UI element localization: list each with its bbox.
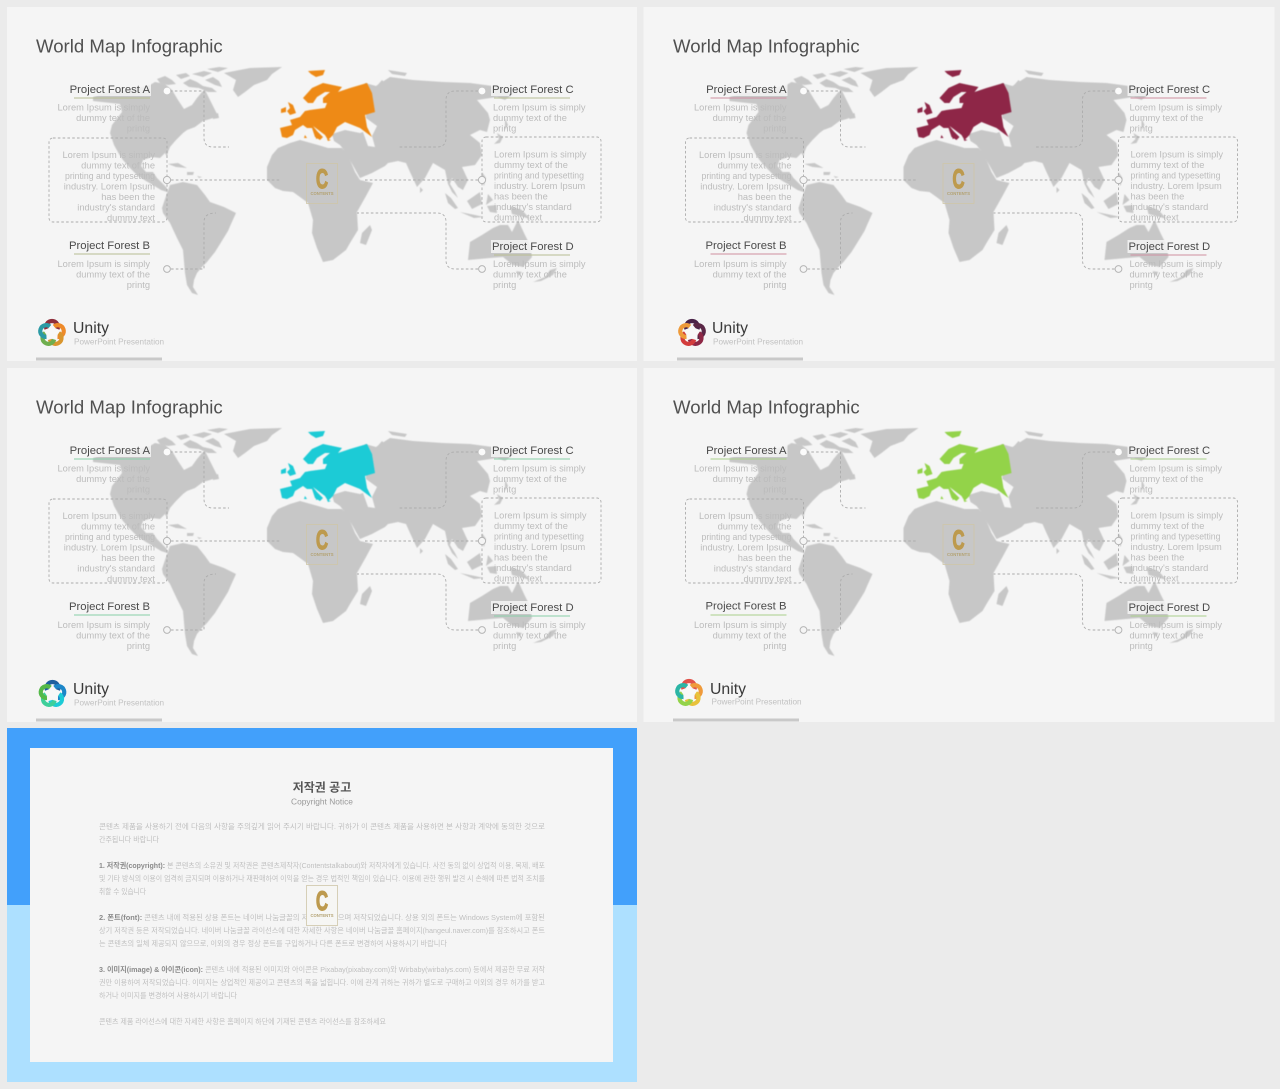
callout: left box text xyxy=(699,511,792,584)
callout: right box text xyxy=(1130,150,1223,222)
callout: left box text: printing and typesetting xyxy=(702,171,792,181)
highlighted Europe xyxy=(916,70,1012,141)
notice paragraph 3 xyxy=(99,965,545,1000)
callout: right box text: printing and typesetting xyxy=(494,170,584,180)
brand text: PowerPoint Presentation xyxy=(74,698,165,708)
callout: right box text: Lorem Ipsum is simply xyxy=(494,510,587,520)
callout: Project Forest D: dummy text of the xyxy=(1130,630,1203,640)
callout: Project Forest B: Lorem Ipsum is simply xyxy=(58,620,150,630)
callout: Project Forest A: printg xyxy=(763,124,786,134)
callout: left box text: has been the xyxy=(738,192,792,202)
callout: Project Forest C xyxy=(491,83,586,134)
notice paragraph 1: 취할 수 있습니다 xyxy=(99,887,146,896)
callout: Project Forest B: printg xyxy=(763,641,786,651)
callout: right box text: industry. Lorem Ipsum xyxy=(1130,542,1222,552)
callout: Project Forest B: dummy text of the xyxy=(76,630,150,640)
watermark badge: CONTENTS xyxy=(947,552,970,557)
subheading: Copyright Notice xyxy=(291,796,353,806)
callout: right box text: industry's standard xyxy=(1130,563,1208,573)
footer bar xyxy=(36,718,162,722)
callout: left box text: dummy text xyxy=(107,213,155,223)
callout: right box text: Lorem Ipsum is simply xyxy=(494,150,587,160)
notice paragraph 1: 및 기타 방식의 이용이 엄격히 금지되며 이용하거나 재판매하여 이익을 얻는 경우 법적인 책임이 있습니다. 이용에 관한 행위 발견 시 손해에 따른 법적 조치를 xyxy=(99,874,545,883)
highlighted Europe xyxy=(280,431,375,502)
notice footer line: 콘텐츠 제품 라이선스에 대한 자세한 사항은 홈페이지 하단에 기재된 콘텐츠 라이선스를 참조하세요 xyxy=(99,1017,386,1026)
notice paragraph intro: 간주됩니다 바랍니다 xyxy=(99,835,159,844)
callout: Project Forest C xyxy=(1128,444,1222,494)
callout: right box text: printing and typesetting xyxy=(1130,532,1220,542)
world map xyxy=(730,428,1194,656)
callout: left box text: industry. Lorem Ipsum xyxy=(700,542,792,552)
notice paragraph 3: 하거나 이미지를 변경하여 사용하시기 바랍니다 xyxy=(99,991,237,1000)
watermark badge: C xyxy=(316,525,328,555)
callout: right box text: industry's standard xyxy=(1130,202,1208,212)
callout: Project Forest C: Project Forest C xyxy=(492,84,574,96)
callout: Project Forest C: Project Forest C xyxy=(1128,445,1210,457)
panel: slide 1 orange xyxy=(7,7,637,361)
callout: Project Forest A: printg xyxy=(763,484,786,494)
footer bar xyxy=(677,358,803,360)
callout: right box text: Lorem Ipsum is simply xyxy=(1130,510,1223,520)
callout: Project Forest D: dummy text of the xyxy=(1130,270,1203,280)
callout: left box text: dummy text of the xyxy=(718,522,792,532)
callout: right box text: Lorem Ipsum is simply xyxy=(1130,150,1223,160)
callout: right box text: dummy text xyxy=(494,574,542,584)
callout: Project Forest D: printg xyxy=(1130,280,1153,290)
callout: left box text: dummy text xyxy=(743,574,792,584)
callout: right box text: industry's standard xyxy=(494,202,572,212)
connector nodes xyxy=(163,88,486,272)
callout: Project Forest A: dummy text of the xyxy=(76,474,150,484)
callout: left box text: has been the xyxy=(738,553,792,563)
brand text xyxy=(710,681,802,706)
watermark badge xyxy=(943,164,974,204)
callout: Project Forest D: Project Forest D xyxy=(1128,241,1210,253)
callout: Project Forest C: Lorem Ipsum is simply xyxy=(493,464,586,474)
callout: Project Forest A: Project Forest A xyxy=(70,445,150,457)
callout: right box text xyxy=(1130,510,1223,584)
callout: left box text: industry's standard xyxy=(77,564,155,574)
callout: right box text: has been the xyxy=(1130,552,1184,562)
callout: left box text: printing and typesetting xyxy=(65,171,155,181)
callout: Project Forest B xyxy=(694,600,788,651)
watermark badge: C xyxy=(316,164,328,194)
callout: right box text: industry. Lorem Ipsum xyxy=(494,542,586,552)
callout: Project Forest D: Lorem Ipsum is simply xyxy=(493,259,586,269)
callout: right box text: industry. Lorem Ipsum xyxy=(1130,181,1222,191)
icon: Unity logo xyxy=(679,321,705,346)
icon: Unity logo xyxy=(676,681,702,706)
callout: right box text: industry's standard xyxy=(494,563,572,573)
callout: Project Forest A xyxy=(694,444,788,494)
callout: left box text: dummy text of the xyxy=(81,160,155,170)
callout: Project Forest A: printg xyxy=(127,124,150,134)
callout: Project Forest C: Project Forest C xyxy=(1128,84,1210,96)
title: World Map Infographic xyxy=(36,36,223,56)
callout: left box text: industry's standard xyxy=(714,202,792,212)
callout: Project Forest C: printg xyxy=(1130,124,1153,134)
callout: left box text: dummy text xyxy=(743,213,792,223)
callout: Project Forest A: dummy text of the xyxy=(76,113,150,123)
world map xyxy=(93,67,557,295)
callout: Project Forest C: printg xyxy=(1130,484,1153,494)
brand text: PowerPoint Presentation xyxy=(712,698,802,706)
callout: Project Forest B: Lorem Ipsum is simply xyxy=(694,259,787,269)
callout: right box text: dummy text of the xyxy=(1130,160,1204,170)
callout: Project Forest B xyxy=(58,239,151,290)
watermark badge xyxy=(306,886,338,926)
title: World Map Infographic xyxy=(36,396,223,418)
callout: left box text: industry. Lorem Ipsum xyxy=(64,542,155,552)
callout: Project Forest A: Project Forest A xyxy=(706,445,787,457)
callout: Project Forest D: Lorem Ipsum is simply xyxy=(1130,620,1222,630)
callout: Project Forest C: Project Forest C xyxy=(492,445,574,457)
panel: slide 3 cyan xyxy=(7,368,637,722)
panel: slide 2 crimson xyxy=(644,7,1274,361)
notice paragraph intro xyxy=(99,822,545,844)
watermark badge xyxy=(943,524,974,564)
watermark badge: CONTENTS xyxy=(310,191,334,196)
callout: right box text: has been the xyxy=(494,192,548,202)
callout: Project Forest A xyxy=(58,83,151,134)
brand text: Unity xyxy=(73,320,109,337)
callout: left box text: dummy text of the xyxy=(718,160,792,170)
callout: left box text: dummy text of the xyxy=(81,522,155,532)
footer bar xyxy=(673,718,799,722)
callout: Project Forest D: printg xyxy=(493,641,516,651)
watermark badge: CONTENTS xyxy=(947,191,970,196)
connector nodes xyxy=(800,88,1122,272)
notice paragraph 1: 1. 저작권(copyright): 본 콘텐츠의 소유권 및 저작권은 콘텐츠제작자(Contentstalkabout)와 저작자에게 있습니다. 사전 동의 없이 상업적 이용, 복제, 배포 xyxy=(99,861,545,870)
callout: right box text: has been the xyxy=(494,552,548,562)
callout: right box text: industry. Lorem Ipsum xyxy=(494,181,586,191)
callout: Project Forest A: Lorem Ipsum is simply xyxy=(58,464,150,474)
callout: left box text: Lorem Ipsum is simply xyxy=(699,150,792,160)
brand text xyxy=(712,320,804,346)
callout: Project Forest D: dummy text of the xyxy=(493,270,567,280)
callout: Project Forest A: Lorem Ipsum is simply xyxy=(58,102,150,112)
callout: Project Forest A: Project Forest A xyxy=(70,84,150,96)
callout: right box text: printing and typesetting xyxy=(1130,170,1220,180)
callout: Project Forest A: printg xyxy=(127,484,150,494)
callout: right box text: dummy text xyxy=(494,212,542,222)
notice paragraph 2: 상기 저작권 등은 저작되었습니다. 네이버 나눔글꼴 라이선스에 대한 자세한 사항은 네이버 나눔글꼴 홈페이지(hangeul.naver.com)를 참조하시고 폰트 xyxy=(99,926,545,935)
connector lines xyxy=(49,452,601,630)
panel: slide 4 green xyxy=(644,368,1274,722)
callout: Project Forest B: Project Forest B xyxy=(706,600,786,612)
callout: Project Forest D xyxy=(491,601,586,651)
callout: left box text: has been the xyxy=(101,192,155,202)
callout: left box text: printing and typesetting xyxy=(702,532,792,542)
callout: right box text: dummy text of the xyxy=(494,521,568,531)
footer bar xyxy=(36,358,162,360)
connector lines xyxy=(686,452,1238,630)
notice paragraph 3: 권만 이용하여 저작되었습니다. 이미지는 상업적인 제공이고 콘텐츠의 폭을 넓힙니다. 이에 관계 귀하는 귀하가 별도로 구매하고 이외의 경우 허가를 받고 xyxy=(99,978,545,987)
callout: Project Forest B: Lorem Ipsum is simply xyxy=(58,259,150,269)
title: World Map Infographic xyxy=(673,36,860,56)
callout: left box text xyxy=(63,511,155,584)
callout: left box text: Lorem Ipsum is simply xyxy=(63,511,155,521)
icon: Unity logo xyxy=(39,682,66,707)
callout: Project Forest B: printg xyxy=(763,280,786,290)
notice paragraph 2: 2. 폰트(font): 콘텐츠 내에 적용된 상용 폰트는 네이버 나눔글꼴의 저작권에 있으며 저작되었습니다. 상용 외의 폰트는 Windows System에 포함된 xyxy=(99,913,545,922)
notice paragraph 2 xyxy=(99,913,545,948)
brand text xyxy=(73,681,165,708)
icon: Unity logo xyxy=(39,321,65,346)
callout: Project Forest D: dummy text of the xyxy=(493,630,567,640)
callout: left box text: industry's standard xyxy=(77,202,155,212)
callout: Project Forest C: printg xyxy=(493,124,516,134)
callout: Project Forest D xyxy=(1128,240,1222,290)
callout: Project Forest B: printg xyxy=(127,280,150,290)
callout: left box text xyxy=(699,150,792,223)
callout: left box text: industry's standard xyxy=(714,564,792,574)
callout: Project Forest D: Lorem Ipsum is simply xyxy=(1130,259,1222,269)
callout: Project Forest C xyxy=(1128,83,1222,134)
callout: Project Forest A: dummy text of the xyxy=(713,474,786,484)
callout: Project Forest B: Project Forest B xyxy=(69,240,150,252)
callout: Project Forest B: dummy text of the xyxy=(713,270,786,280)
highlighted Europe xyxy=(916,431,1012,502)
callout: Project Forest B: dummy text of the xyxy=(76,270,150,280)
watermark badge: C xyxy=(952,164,964,194)
callout: right box text: dummy text of the xyxy=(1130,521,1204,531)
panel: copyright notice xyxy=(7,728,637,1082)
callout: Project Forest D xyxy=(491,240,586,290)
callout: Project Forest D: printg xyxy=(1130,641,1153,651)
brand text: PowerPoint Presentation xyxy=(713,338,804,346)
watermark badge xyxy=(306,524,338,564)
callout: left box text: Lorem Ipsum is simply xyxy=(63,150,155,160)
callout: left box text xyxy=(63,150,155,223)
callout: right box text: dummy text xyxy=(1130,212,1179,222)
callout: right box text: has been the xyxy=(1130,192,1184,202)
callout: left box text: Lorem Ipsum is simply xyxy=(699,511,792,521)
callout: Project Forest A: Lorem Ipsum is simply xyxy=(694,102,787,112)
callout: left box text: industry. Lorem Ipsum xyxy=(700,182,792,192)
callout: Project Forest C xyxy=(491,444,586,494)
heading: copyright notice: 저작권 공고 xyxy=(293,780,351,794)
callout: Project Forest B: Project Forest B xyxy=(69,601,150,613)
brand text: PowerPoint Presentation xyxy=(74,338,165,346)
callout: Project Forest B: dummy text of the xyxy=(713,630,786,640)
callout: Project Forest B xyxy=(694,239,788,290)
callout: right box text xyxy=(494,150,587,222)
callout: right box text xyxy=(494,510,587,584)
callout: Project Forest B xyxy=(58,600,151,651)
callout: right box text: printing and typesetting xyxy=(494,532,584,542)
callout: Project Forest B: Lorem Ipsum is simply xyxy=(694,620,787,630)
connector nodes xyxy=(163,449,486,633)
brand text xyxy=(73,320,165,346)
brand text: Unity xyxy=(710,681,746,698)
callout: left box text: dummy text xyxy=(107,574,155,584)
watermark badge: CONTENTS xyxy=(310,552,334,557)
callout: Project Forest D: Lorem Ipsum is simply xyxy=(493,620,586,630)
callout: Project Forest D: Project Forest D xyxy=(492,602,574,614)
watermark badge xyxy=(306,164,338,204)
watermark badge: CONTENTS xyxy=(310,913,334,918)
callout: right box text: dummy text of the xyxy=(494,160,568,170)
callout: Project Forest D xyxy=(1128,601,1222,651)
notice paragraph 3: 3. 이미지(image) & 아이콘(icon): 콘텐츠 내에 적용된 이미지와 아이콘은 Pixabay(pixabay.com)와 Wirbaby(wirbalys.com) 등에서 제공한 무료 저작 xyxy=(99,965,545,974)
connector lines xyxy=(686,91,1238,269)
callout: right box text: dummy text xyxy=(1130,574,1179,584)
callout: Project Forest C: Lorem Ipsum is simply xyxy=(1130,102,1222,112)
callout: Project Forest D: printg xyxy=(493,280,516,290)
callout: Project Forest A xyxy=(694,83,788,134)
callout: Project Forest B: Project Forest B xyxy=(706,240,786,252)
callout: left box text: printing and typesetting xyxy=(65,532,155,542)
brand text: Unity xyxy=(712,320,748,337)
callout: Project Forest C: dummy text of the xyxy=(493,113,567,123)
connector lines xyxy=(49,91,601,269)
callout: Project Forest A: Lorem Ipsum is simply xyxy=(694,464,787,474)
callout: Project Forest C: dummy text of the xyxy=(493,474,567,484)
connector nodes xyxy=(800,449,1122,633)
brand text: Unity xyxy=(73,681,109,698)
callout: Project Forest A: Project Forest A xyxy=(706,84,787,96)
highlighted Europe xyxy=(280,70,375,141)
callout: Project Forest B: printg xyxy=(127,641,150,651)
callout: left box text: has been the xyxy=(101,553,155,563)
callout: Project Forest C: dummy text of the xyxy=(1130,113,1203,123)
notice paragraph intro: 콘텐츠 제품을 사용하기 전에 다음의 사항을 주의깊게 읽어 주시기 바랍니다. 귀하가 이 콘텐츠 제품을 사용하면 본 사항과 계약에 동의한 것으로 xyxy=(99,822,545,831)
callout: Project Forest A: dummy text of the xyxy=(713,113,786,123)
callout: Project Forest C: Lorem Ipsum is simply xyxy=(493,102,586,112)
watermark badge: C xyxy=(952,525,964,555)
world map xyxy=(93,428,557,656)
callout: left box text: industry. Lorem Ipsum xyxy=(64,182,155,192)
title: World Map Infographic xyxy=(673,396,860,418)
callout: Project Forest A xyxy=(58,444,151,494)
notice paragraph 2: 는 콘텐츠의 일체 제공되지 않으므로, 이외의 경우 정상 폰트를 구입하거나 다른 폰트로 변경하여 사용하시기 바랍니다 xyxy=(99,939,447,948)
notice paragraph 1 xyxy=(99,861,545,896)
callout: Project Forest C: printg xyxy=(493,484,516,494)
callout: Project Forest D: Project Forest D xyxy=(1128,602,1210,614)
callout: Project Forest C: Lorem Ipsum is simply xyxy=(1130,464,1222,474)
callout: Project Forest D: Project Forest D xyxy=(492,241,574,253)
world map xyxy=(730,67,1194,295)
watermark badge: C xyxy=(316,886,328,916)
callout: Project Forest C: dummy text of the xyxy=(1130,474,1203,484)
